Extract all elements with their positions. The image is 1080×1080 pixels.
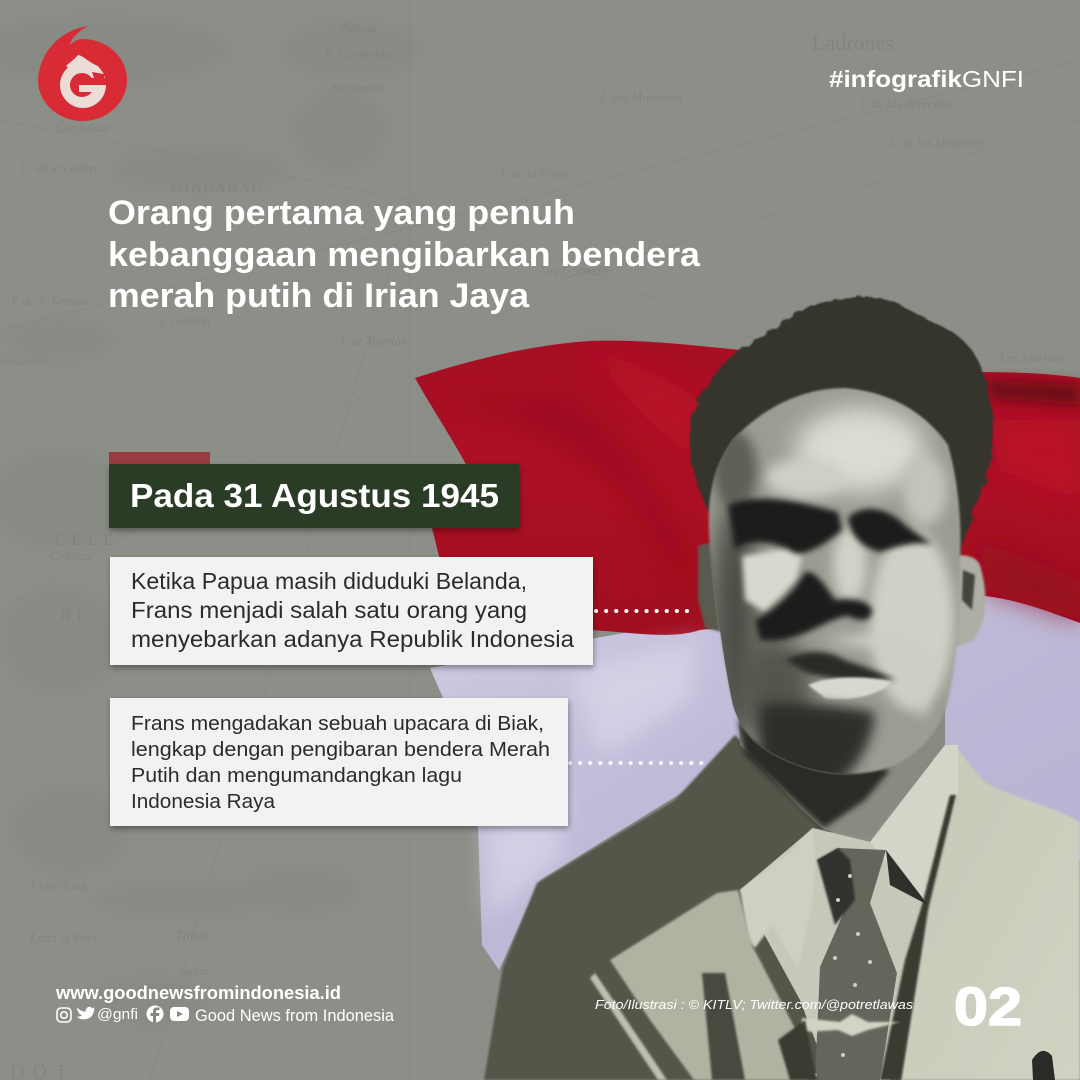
shirt (740, 828, 930, 1080)
background: vintage map: Candylaar (55, 120, 112, 135)
face shading (711, 408, 954, 790)
tie (813, 848, 897, 1080)
footer: brand name: Good News from Indonesia (195, 1006, 395, 1025)
connector: dotted line to box 1 (596, 609, 695, 613)
background: vintage map: Pedras (339, 20, 377, 35)
text box 1 (110, 557, 593, 665)
background: vintage map: Sabal (180, 963, 210, 978)
title: merah putih di Irian Jaya (108, 277, 530, 315)
flag: white stripe highlights (485, 640, 700, 920)
right ear (950, 555, 985, 650)
background: vintage map: I. des Matelotes (599, 90, 683, 105)
handle: @gnfi: @gnfi (97, 1006, 138, 1023)
jacket: light right side (901, 745, 1080, 1080)
background: vintage map: C. de la Galere (20, 160, 100, 175)
connector: dotted line to box 2 (570, 761, 702, 765)
background: vintage map: Land of Pafs (29, 930, 96, 945)
flag: red stripe (415, 341, 1080, 635)
background: vintage map: I. de las Arrecifes (859, 96, 952, 111)
icon: twitter (77, 1007, 95, 1019)
jacket: dark left side (484, 735, 900, 1080)
background: vintage map: Timor (175, 928, 211, 944)
face base (709, 388, 960, 774)
text box 2: Indonesia Raya (131, 791, 276, 813)
flag: lavender white stripe (430, 595, 1080, 970)
neck shadow (738, 720, 890, 828)
ear inner shadow (962, 570, 975, 610)
text box 1: menyebarkan adanya Republik Indonesia (131, 626, 574, 652)
icon: youtube (170, 1007, 189, 1021)
text box 2: lengkap dengan pengibaran bendera Merah (131, 739, 550, 761)
title (108, 194, 701, 315)
text box 2: Putih dan mengumandangkan lagu (131, 765, 462, 787)
hashtag: infografikGNFI: #infografik GNFI (829, 66, 1024, 92)
jacket left inner dark fold (702, 973, 745, 1080)
background: vintage map: Anosbalao (329, 80, 386, 95)
page number: 02 (954, 977, 1022, 1037)
date label: Pada 31 Agustus 1945: Pada 31 Agustus 1945 (130, 477, 499, 514)
text box 2 (110, 698, 568, 826)
text box 2: Frans mengadakan sebuah upacara di Biak, (131, 713, 544, 735)
jacket pocket edge (590, 973, 667, 1080)
background: vintage map: Celebes (50, 548, 91, 563)
background: vintage map: I. de los Matelotes (889, 135, 986, 150)
background: vintage map: I. de Tabelas (339, 333, 406, 348)
background: vintage map: Ladrones (812, 30, 894, 55)
jacket lapel shadow line (880, 795, 956, 1080)
date accent tab (109, 452, 210, 466)
background: vintage map: MINDANAO (170, 181, 264, 196)
left ear (698, 542, 722, 632)
background: vintage map: CELE (55, 532, 119, 549)
jacket left light panel (610, 890, 809, 1080)
background: vintage map: Sadosion (0, 353, 48, 368)
pen in pocket (1032, 1051, 1055, 1080)
background: vintage map: T. de S. Lesson (10, 293, 87, 308)
dark shadow under right collar (886, 850, 928, 905)
background: vintage map: I. de la Freta (499, 166, 569, 181)
footer: website: www.goodnewsfromindonesia.id (55, 983, 341, 1003)
text box 1: Ketika Papua masih diduduki Belanda, (131, 568, 527, 594)
background: vintage map: Les Marines (999, 350, 1065, 365)
logo: GNFI red six with white garuda G (38, 26, 127, 121)
portrait: man in jacket and tie (484, 297, 1080, 1080)
title: kebanggaan mengibarkan bendera (108, 236, 701, 274)
background: vintage map: Florit Ende (29, 878, 91, 893)
shirt collar right (870, 745, 958, 908)
hair (690, 297, 993, 555)
jacket left lower fold (778, 1020, 817, 1080)
background: vintage map: I. Isoliton (159, 313, 211, 328)
background: vintage map: BE (60, 607, 92, 624)
icon: facebook (146, 1006, 164, 1023)
background: vintage map: Les I. Somans (539, 263, 613, 278)
collar left (740, 828, 815, 968)
icon: instagram (57, 1008, 71, 1022)
title: Orang pertama yang penuh (108, 194, 575, 232)
date label: Pada 31 Agustus 1945 (109, 464, 519, 528)
tie clip (802, 1014, 900, 1036)
text box 1: Frans menjadi salah satu orang yang (131, 597, 527, 623)
photo credit: Foto/Ilustrasi : © KITLV; Twitter.com/@potretlawas (595, 997, 914, 1012)
neck (738, 700, 945, 838)
background: vintage map: P. Conmocho (324, 46, 395, 61)
